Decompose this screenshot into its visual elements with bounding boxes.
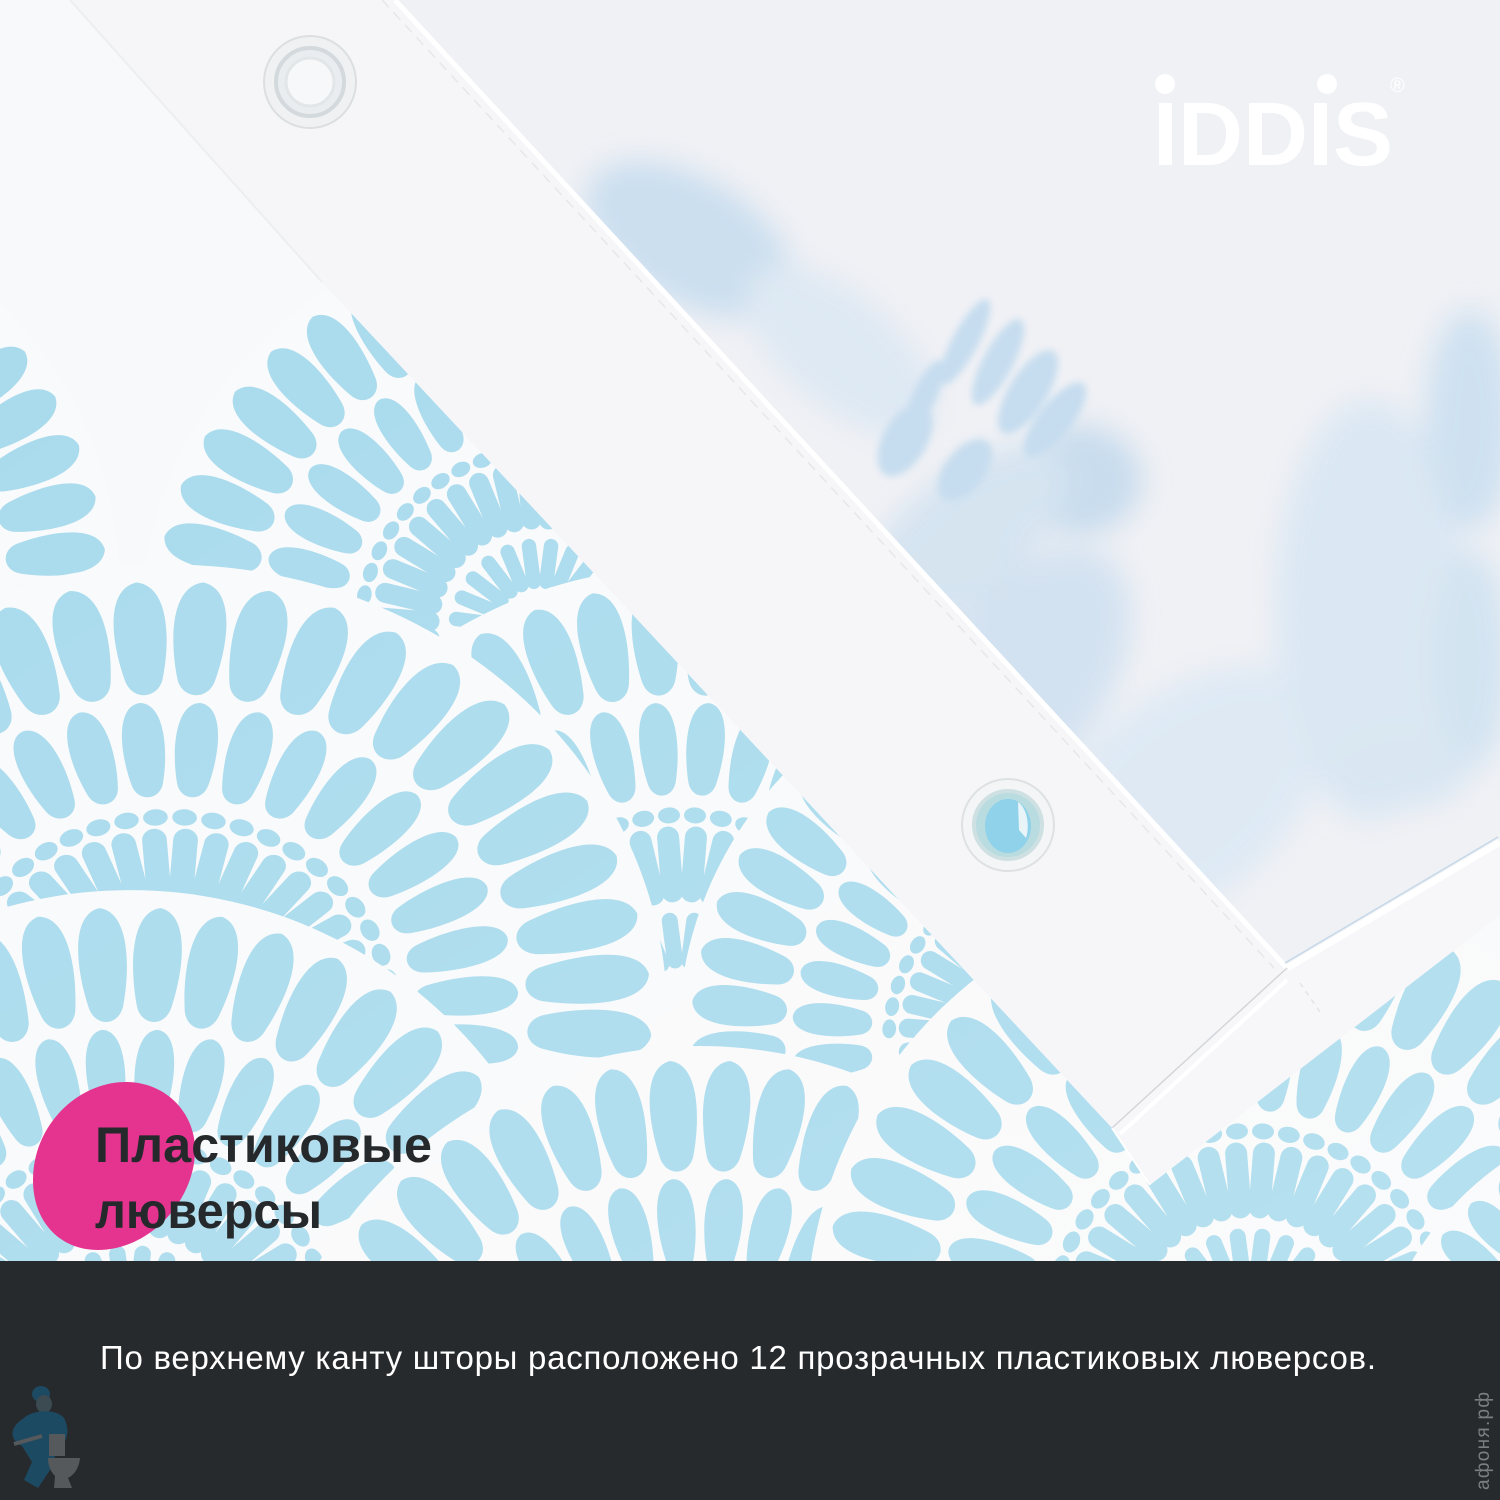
decorative pink blob <box>33 1082 195 1250</box>
panel: printed fan pattern on curtain front <box>0 313 1500 1261</box>
panel: dark footer <box>0 1261 1500 1500</box>
text block: site watermark: афоня.рф <box>1473 1392 1494 1490</box>
panel: top hem band <box>70 0 1287 1128</box>
icon: plumber watermark <box>12 1386 80 1488</box>
heading: plastic grommets: люверсы <box>95 1183 322 1239</box>
logo: iddis: IDDIS <box>1153 85 1393 185</box>
panel: side hem band <box>1112 842 1500 1185</box>
logo: iddis: ® <box>1390 75 1405 97</box>
text block: description: По верхнему канту шторы расположено 12 прозрачных пластиковых люверсов. <box>100 1339 1376 1376</box>
stitching along hem edges <box>70 0 1500 1185</box>
icon: lower grommet <box>962 779 1054 871</box>
heading: plastic grommets: Пластиковые <box>95 1117 432 1173</box>
icon: top grommet <box>264 36 356 128</box>
heading: plastic grommets <box>95 1117 432 1239</box>
panel: back layer of curtain seen through <box>560 131 1500 964</box>
